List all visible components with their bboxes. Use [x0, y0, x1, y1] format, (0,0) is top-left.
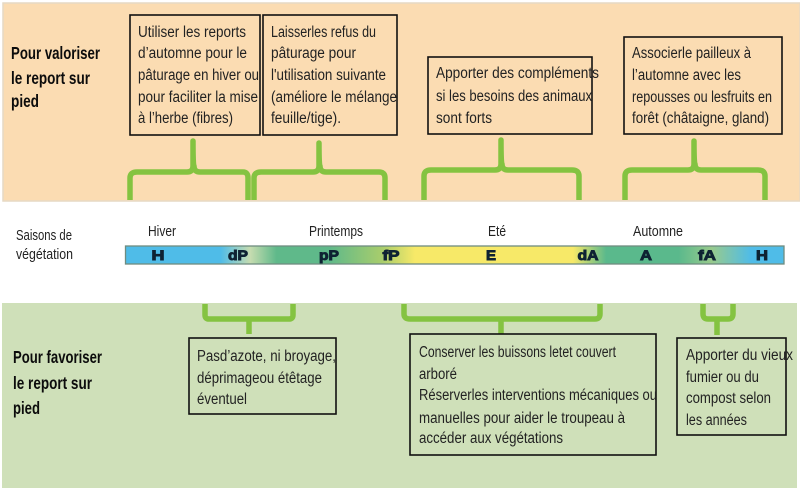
heading: pour favoriser: le report sur	[13, 373, 92, 393]
season names: Hiver	[148, 223, 176, 240]
text box: azote: Pasd’azote, ni broyage,	[197, 348, 336, 365]
text box: compléments: Apporter des compléments	[436, 65, 599, 82]
text box: azote: éventuel	[197, 391, 247, 408]
season gradient bar: fP	[382, 247, 400, 263]
season gradient bar	[126, 246, 784, 264]
text box: pailleux à l'automne	[624, 37, 782, 134]
text box: compléments: sont forts	[436, 110, 492, 127]
label: saisons de végétation	[16, 227, 73, 263]
text box: azote: déprimageou étêtage	[197, 370, 322, 387]
heading: pour favoriser	[13, 347, 102, 418]
heading: pour valoriser: Pour valoriser	[11, 43, 100, 63]
bracket: top 3	[424, 140, 579, 200]
text box: buissons et interventions	[410, 334, 657, 455]
bracket: bottom 1	[205, 304, 293, 334]
heading: pour valoriser: pied	[11, 91, 39, 111]
text box: vieux fumier	[677, 338, 793, 435]
label: saisons de végétation: Saisons de	[16, 227, 72, 244]
text box: reports d'automne	[130, 15, 260, 135]
season gradient bar: pP	[319, 247, 339, 263]
text box: pailleux à l'automne: forêt (châtaigne, gland)	[632, 110, 769, 127]
panel: favoriser le report sur pied	[2, 303, 797, 488]
season gradient bar: H	[756, 247, 768, 263]
panel: valoriser le report sur pied	[3, 3, 800, 201]
text box: compléments: si les besoins des animaux	[436, 88, 592, 105]
bracket: bottom 2	[404, 304, 600, 334]
bracket: top 1	[130, 141, 248, 200]
text box: refus du pâturage: feuille/tige).	[271, 110, 341, 127]
text box: refus du pâturage: Laisserles refus du	[271, 24, 376, 41]
text box: buissons et interventions: accéder aux végétations	[419, 430, 563, 447]
text box: buissons et interventions: Conserver les buissons letet couvert	[419, 344, 617, 361]
text box: pailleux à l'automne: l’automne avec les	[632, 67, 741, 84]
bracket: top 2	[254, 143, 385, 200]
season names: Automne	[633, 223, 683, 240]
season gradient bar: fA	[698, 247, 716, 263]
text box: refus du pâturage: (améliore le mélange	[271, 89, 397, 106]
heading: pour favoriser: pied	[13, 398, 40, 418]
label: saisons de végétation: végétation	[16, 246, 73, 263]
text box: reports d'automne: Utiliser les reports	[138, 24, 246, 41]
text box: buissons et interventions: arboré	[419, 366, 457, 383]
bracket: top 4	[625, 141, 765, 200]
text box: buissons et interventions: Réserverles interventions mécaniques ou	[419, 387, 657, 404]
heading: pour valoriser: le report sur	[11, 68, 90, 88]
text box: buissons et interventions: manuelles pour aider le troupeau à	[419, 410, 625, 427]
bracket: bottom 3	[703, 304, 733, 335]
text box: refus du pâturage: l'utilisation suivante	[271, 67, 386, 84]
season names: Eté	[488, 223, 506, 240]
season gradient bar: E	[486, 247, 496, 263]
text box: azote	[189, 338, 336, 414]
heading: pour favoriser: Pour favoriser	[13, 347, 102, 367]
season gradient bar: dP	[228, 247, 248, 263]
text box: reports d'automne: pâturage en hiver ou	[138, 67, 259, 84]
text box: pailleux à l'automne: repousses ou lesfruits en	[632, 89, 772, 106]
season gradient bar: dA	[578, 247, 598, 263]
text box: vieux fumier: fumier ou du	[686, 369, 759, 386]
season names	[148, 223, 683, 240]
heading: pour valoriser	[11, 43, 100, 111]
text box: reports d'automne: d’automne pour le	[138, 45, 247, 62]
season names: Printemps	[309, 223, 363, 240]
season gradient bar: H	[152, 247, 164, 263]
text box: vieux fumier: les années	[686, 412, 747, 429]
text box: compléments	[428, 57, 599, 134]
text box: pailleux à l'automne: Associerle pailleux à	[632, 45, 751, 62]
text box: refus du pâturage	[263, 15, 397, 135]
season gradient bar: A	[640, 247, 652, 263]
text box: reports d'automne: à l’herbe (fibres)	[138, 110, 233, 127]
text box: refus du pâturage: pâturage pour	[271, 45, 356, 62]
text box: vieux fumier: compost selon	[686, 390, 771, 407]
text box: reports d'automne: pour faciliter la mise	[138, 89, 258, 106]
